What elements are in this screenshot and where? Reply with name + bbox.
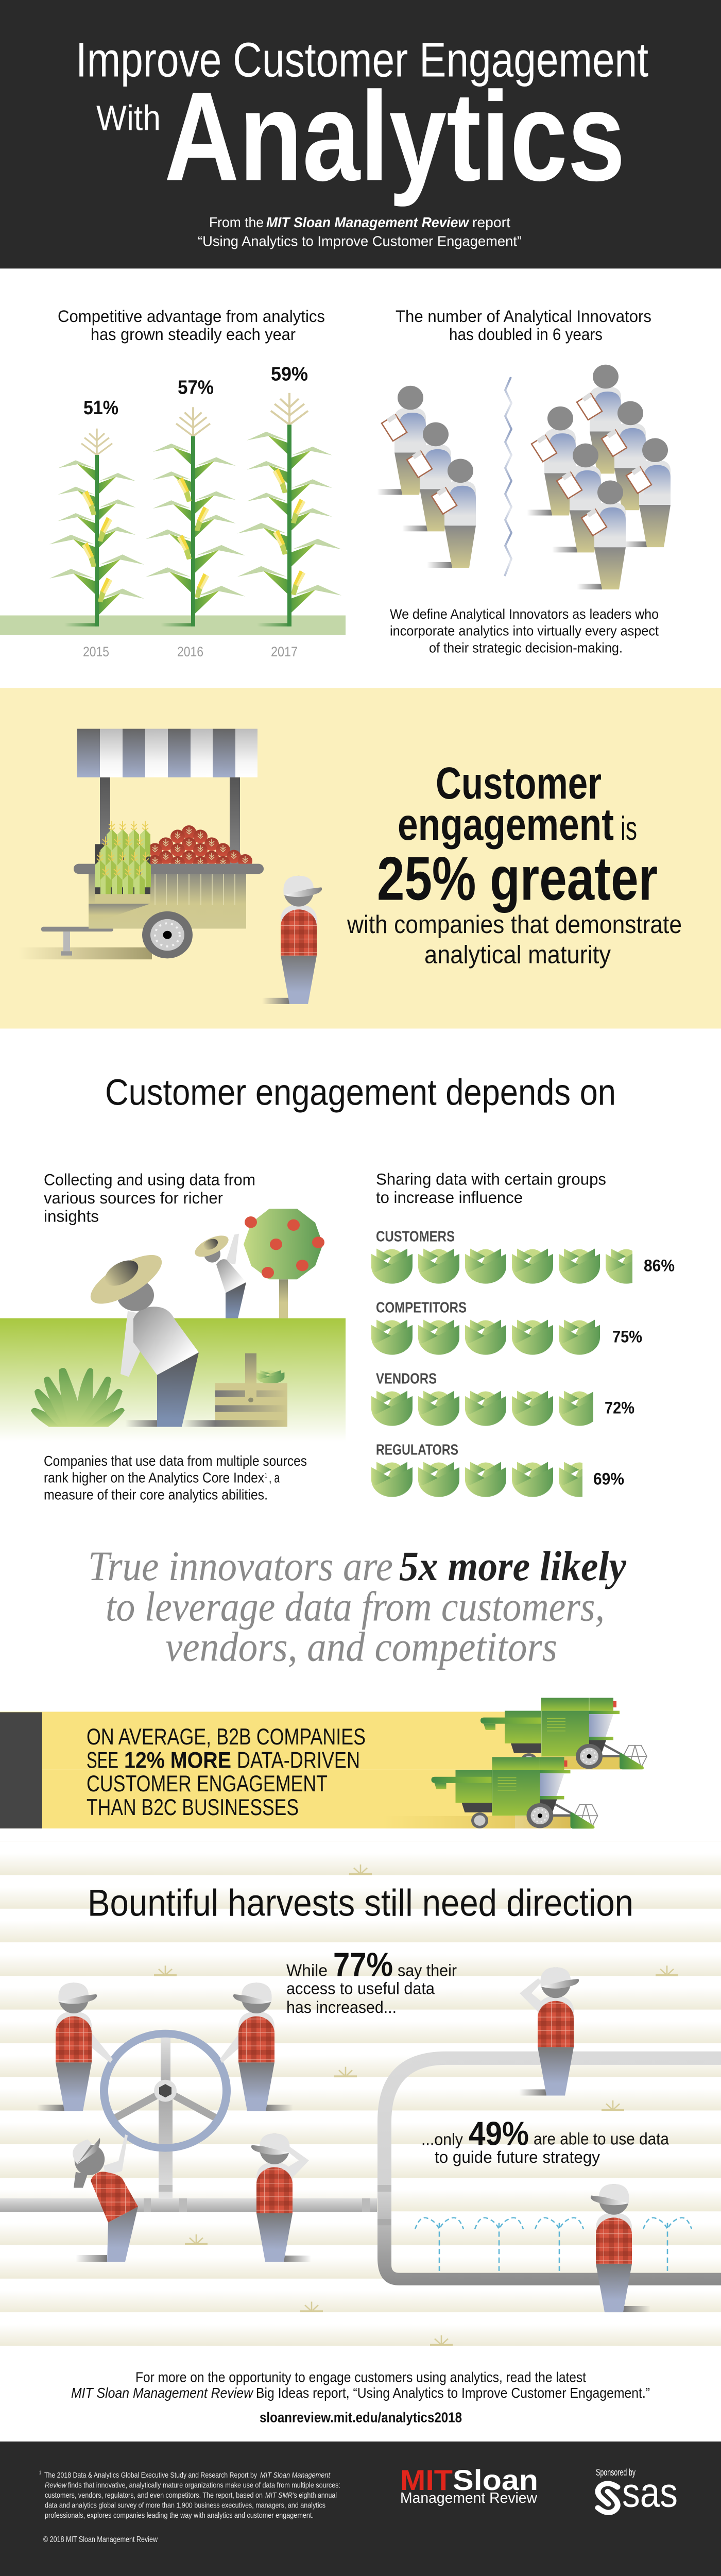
banner text bbox=[87, 1723, 366, 1820]
stat: 49%: are able to use data bbox=[534, 2130, 669, 2148]
zigzag divider bbox=[505, 377, 511, 576]
body text: Analytics Core Index: 1 bbox=[265, 1472, 267, 1480]
call to action: For more on the opportunity to engage customers using analytics, read the latest bbox=[135, 2369, 586, 2385]
footnote: professionals, explores companies leading the way with analytics and customer engagement. bbox=[45, 2512, 314, 2520]
intro text: sharing data bbox=[376, 1170, 606, 1207]
logo: MIT Sloan Management Review: Management Review bbox=[400, 2490, 537, 2506]
subtitle: “Using Analytics to Improve Customer Engagement” bbox=[198, 233, 522, 249]
footnote bbox=[39, 2470, 340, 2520]
footnote: The 2018 Data & Analytics Global Executive Study and Research Report by bbox=[44, 2471, 257, 2480]
row: customers 86% bbox=[371, 1228, 675, 1284]
headline: customer engagement 25% greater: Customer bbox=[436, 758, 602, 808]
stat: 49%: 49% bbox=[469, 2115, 529, 2153]
icon: combine harvesters bbox=[432, 1698, 647, 1828]
body text: Analytics Core Index: rank higher on the Analytics Core Index bbox=[44, 1470, 264, 1486]
stat: 77%: 77% bbox=[333, 1946, 393, 1984]
definition text: incorporate analytics into virtually every aspect bbox=[390, 623, 659, 638]
stat: 77% bbox=[286, 1946, 457, 2017]
value: 51%: 51% bbox=[83, 397, 118, 418]
panel: header bbox=[0, 0, 721, 268]
footnote: MIT Sloan Management bbox=[260, 2471, 331, 2480]
heading: competitive advantage: Competitive advantage from analytics bbox=[58, 307, 325, 326]
axis label: 2015: 2015 bbox=[83, 644, 109, 659]
logo: MIT Sloan Management Review bbox=[400, 2464, 538, 2506]
footnote: finds that innovative, analytically mature organizations make use of data from multiple sources: bbox=[68, 2481, 340, 2489]
body text: Analytics Core Index: Companies that use data from multiple sources bbox=[44, 1453, 307, 1469]
row: vendors 72% bbox=[371, 1370, 634, 1426]
body text: Analytics Core Index bbox=[44, 1453, 307, 1503]
figure: worker at sprinklers bbox=[591, 2184, 650, 2312]
icon: apple tree bbox=[244, 1209, 324, 1318]
panel: yellow customer engagement band bbox=[0, 688, 721, 1028]
green field bbox=[0, 1318, 346, 1442]
logo: SAS bbox=[598, 2469, 678, 2516]
heading: analytical innovators bbox=[396, 307, 651, 344]
heading: analytical innovators: has doubled in 6 years bbox=[449, 325, 603, 344]
footnote: MIT SMR bbox=[265, 2491, 293, 2500]
definition text bbox=[390, 606, 659, 655]
heading: customer engagement depends on: Customer engagement depends on bbox=[105, 1072, 616, 1113]
sponsor label: Sponsored by bbox=[596, 2468, 636, 2478]
subtitle: MIT Sloan Management Review bbox=[266, 215, 470, 231]
panel: B2B banner bbox=[0, 1698, 647, 1828]
call to action bbox=[71, 2369, 650, 2426]
definition text: of their strategic decision-making. bbox=[429, 640, 623, 655]
figure: worker on top pipe bbox=[519, 1968, 579, 2096]
row: regulators 69%: 69% bbox=[593, 1469, 624, 1488]
stat: 49%: to guide future strategy bbox=[435, 2148, 600, 2167]
footnote: data and analytics global survey of more than 1,900 business executives, managers, and analytics bbox=[45, 2501, 325, 2510]
heading: competitive advantage: has grown steadily each year bbox=[91, 325, 296, 344]
stat: 77%: While bbox=[286, 1961, 328, 1980]
intro text: collecting data: insights bbox=[44, 1207, 99, 1225]
banner text: CUSTOMER ENGAGEMENT bbox=[87, 1771, 328, 1797]
pull quote: true innovators bbox=[88, 1544, 627, 1670]
call to action: Big Ideas report, “Using Analytics to Improve Customer Engagement.” bbox=[256, 2385, 650, 2401]
stat: 49%: ...only bbox=[421, 2130, 463, 2149]
corn stalk 2016 bbox=[146, 407, 245, 626]
icon: produce cart bbox=[19, 729, 264, 959]
pull quote: true innovators: to leverage data from customers, bbox=[106, 1584, 605, 1630]
definition text: We define Analytical Innovators as leaders who bbox=[390, 606, 659, 622]
panel: sharing data bbox=[371, 1170, 675, 1497]
logo: SAS: sas bbox=[622, 2469, 678, 2516]
value: 57%: 57% bbox=[178, 377, 214, 398]
row: competitors 75%: COMPETITORS bbox=[376, 1299, 467, 1316]
body text: Analytics Core Index: , a bbox=[269, 1470, 280, 1486]
panel: competitive advantage bbox=[0, 307, 346, 659]
banner text: DATA-DRIVEN bbox=[237, 1747, 360, 1773]
figure: picker bbox=[192, 1231, 246, 1318]
footnote: ’s eighth annual bbox=[293, 2491, 337, 2500]
ground strip bbox=[0, 616, 346, 635]
footnote: customers, vendors, regulators, and even competitors. The report, based on bbox=[45, 2491, 263, 2500]
figure: worker at pipe bbox=[251, 2133, 311, 2262]
banner text: ON AVERAGE, B2B COMPANIES bbox=[87, 1723, 366, 1750]
axis label: 2016: 2016 bbox=[177, 644, 203, 659]
value: 59%: 59% bbox=[271, 363, 308, 385]
intro text: collecting data: various sources for richer bbox=[44, 1189, 223, 1207]
people group: after bbox=[527, 365, 671, 589]
sprouts bbox=[154, 1865, 678, 2346]
intro text: sharing data: Sharing data with certain groups bbox=[376, 1170, 606, 1188]
headline: customer engagement 25% greater: engagement bbox=[398, 800, 614, 850]
icon: valve wheel bbox=[104, 2033, 227, 2199]
axis label: 2017: 2017 bbox=[271, 644, 298, 659]
corn stalk 2015 bbox=[49, 429, 144, 626]
panel: collecting data bbox=[0, 1171, 346, 1503]
row: regulators 69%: REGULATORS bbox=[376, 1442, 458, 1458]
row: regulators 69% bbox=[371, 1442, 624, 1497]
banner text: SEE bbox=[87, 1747, 118, 1773]
copyright: © 2018 MIT Sloan Management Review bbox=[43, 2535, 158, 2544]
subtitle: From the bbox=[209, 215, 264, 231]
footnote: 1 bbox=[39, 2470, 41, 2476]
figure: customer at cart bbox=[262, 876, 322, 1004]
icon: basket of lettuce bbox=[215, 1353, 287, 1427]
intro text: collecting data: Collecting and using data from bbox=[44, 1171, 255, 1189]
intro text: collecting data bbox=[44, 1171, 255, 1225]
banner text: 12% MORE bbox=[124, 1747, 231, 1773]
row: competitors 75% bbox=[371, 1299, 642, 1355]
stat: 77%: say their bbox=[398, 1961, 457, 1980]
row: competitors 75%: 75% bbox=[612, 1327, 642, 1346]
row: vendors 72%: VENDORS bbox=[376, 1370, 437, 1387]
pull quote: true innovators: True innovators are bbox=[88, 1544, 393, 1589]
panel: bountiful harvests bbox=[0, 1841, 721, 2346]
subtitle: report bbox=[472, 215, 510, 231]
panel: footer bbox=[0, 2442, 721, 2576]
icon: agave plant bbox=[31, 1368, 125, 1427]
figure: worker at wheel right bbox=[220, 1982, 293, 2111]
figure: farmer bbox=[83, 1246, 215, 1427]
pull quote: true innovators: vendors, and competitors bbox=[165, 1624, 557, 1670]
heading: analytical innovators: The number of Analytical Innovators bbox=[396, 307, 651, 326]
body text: Analytics Core Index: measure of their core analytics abilities. bbox=[44, 1487, 268, 1503]
row: vendors 72%: 72% bbox=[605, 1398, 634, 1417]
pipe system bbox=[0, 2052, 721, 2285]
headline: customer engagement 25% greater: analytical maturity bbox=[424, 940, 611, 969]
heading: competitive advantage bbox=[58, 307, 325, 344]
call to action: MIT Sloan Management Review bbox=[71, 2385, 254, 2401]
banner text: THAN B2C BUSINESSES bbox=[87, 1794, 299, 1820]
people group: before bbox=[377, 386, 476, 568]
logo: MIT Sloan Management Review: Sloan bbox=[453, 2464, 538, 2497]
headline: customer engagement 25% greater: is bbox=[621, 810, 637, 847]
pull quote: true innovators: 5x more likely bbox=[399, 1544, 627, 1589]
intro text: sharing data: to increase influence bbox=[376, 1188, 523, 1207]
figure: worker at wheel left bbox=[37, 1982, 113, 2111]
sprinklers bbox=[415, 2218, 692, 2271]
panel: analytical innovators bbox=[377, 307, 671, 655]
corn stalk 2017 bbox=[237, 393, 341, 626]
row: customers 86%: 86% bbox=[644, 1256, 675, 1275]
call to action: sloanreview.mit.edu/analytics2018 bbox=[260, 2410, 462, 2426]
logo: MIT Sloan Management Review: MIT bbox=[400, 2464, 453, 2497]
title word: With: With bbox=[96, 98, 161, 138]
stat: 77%: access to useful data bbox=[286, 1979, 435, 1998]
row: customers 86%: CUSTOMERS bbox=[376, 1228, 455, 1245]
figure: woman at wheel bbox=[71, 2134, 138, 2262]
footnote: Review bbox=[45, 2481, 67, 2489]
headline: customer engagement 25% greater bbox=[347, 758, 682, 969]
subtitle bbox=[198, 215, 522, 249]
stat: 49% bbox=[421, 2115, 669, 2167]
stat: 77%: has increased... bbox=[286, 1998, 397, 2017]
